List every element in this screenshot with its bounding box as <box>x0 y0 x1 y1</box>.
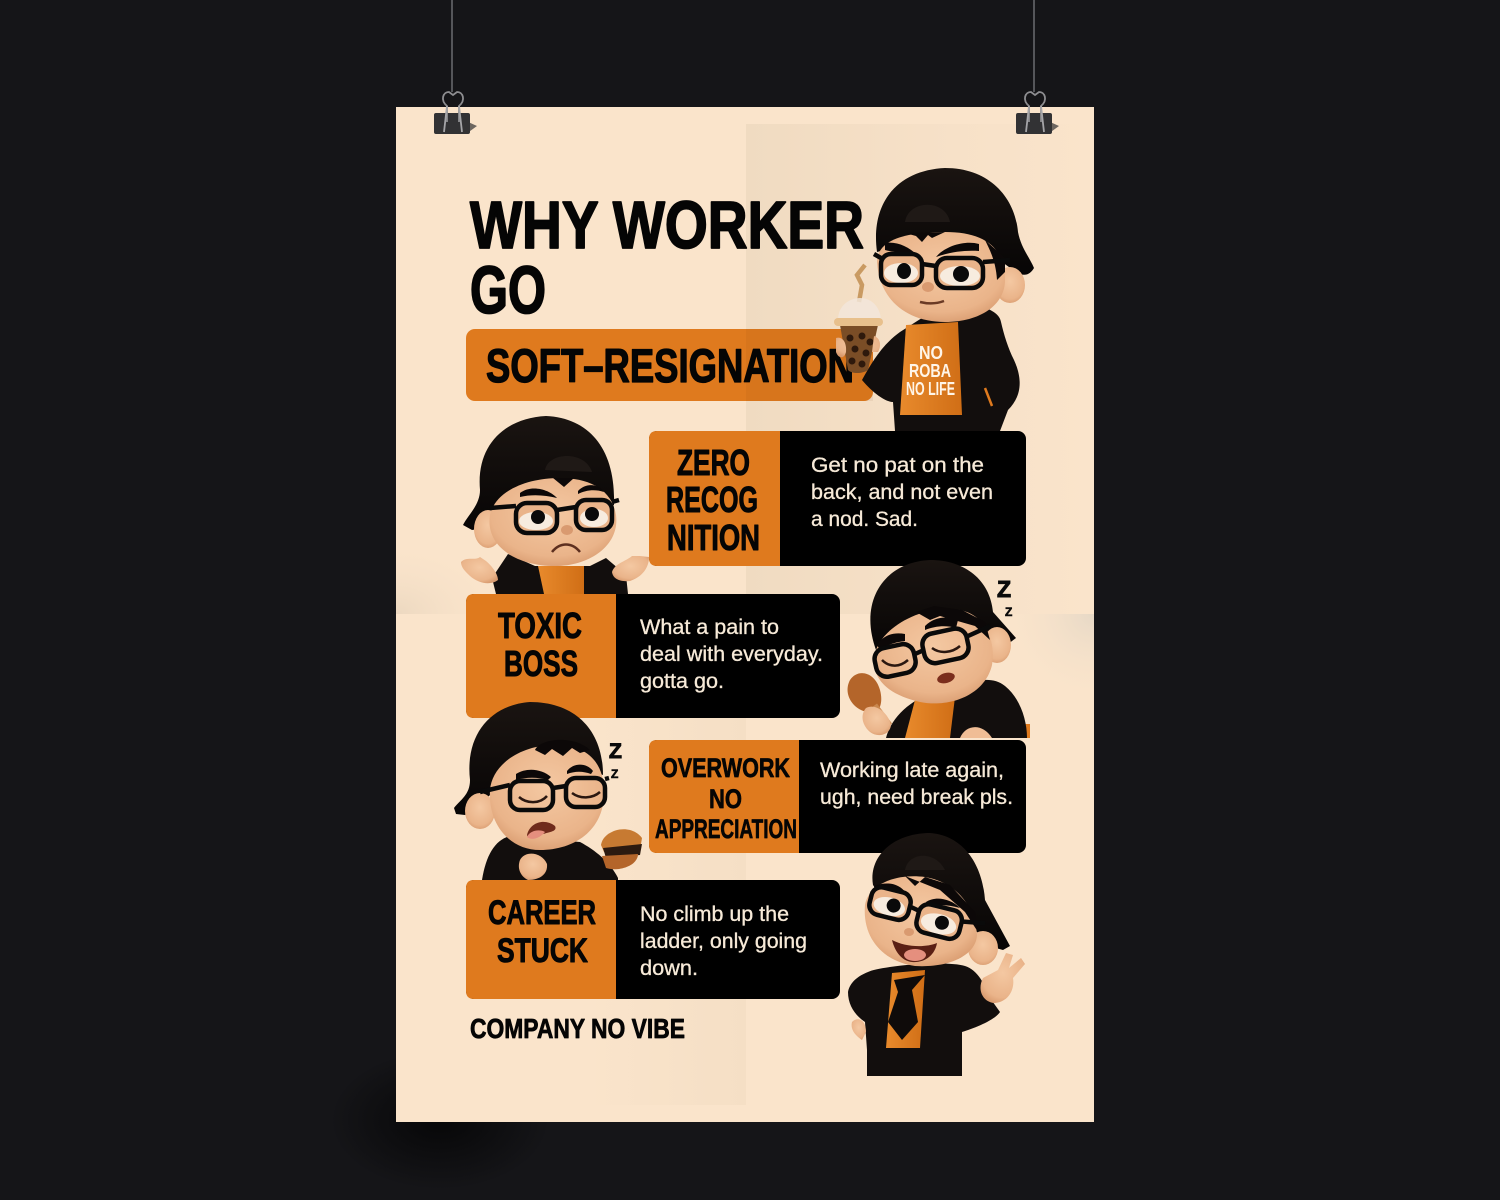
character: dozing with chicken <box>848 560 1030 738</box>
hair <box>916 606 990 640</box>
hair <box>535 740 590 756</box>
poster sheet <box>396 107 1094 1122</box>
character: peace sign <box>848 833 1025 1076</box>
snore z: Z <box>1005 605 1012 619</box>
fringe <box>905 232 1005 280</box>
card: career stuck: STUCK <box>497 932 588 970</box>
poster shadow <box>330 1050 550 1190</box>
mouth <box>527 822 556 838</box>
mouth <box>936 671 956 685</box>
hair <box>905 876 978 932</box>
ear <box>983 627 1011 663</box>
card: career stuck: No climb up the <box>640 903 789 926</box>
cap <box>463 416 614 530</box>
closed eyes <box>519 792 600 802</box>
orange tee <box>886 970 925 1048</box>
ear <box>474 510 502 548</box>
glasses <box>873 626 990 679</box>
brows <box>885 243 979 257</box>
left hand <box>852 1019 866 1040</box>
face <box>490 745 604 850</box>
face <box>489 478 616 566</box>
face <box>877 232 1005 322</box>
subtitle banner <box>466 329 873 401</box>
boba cup <box>857 265 865 302</box>
card: zero recognition: ZERO <box>677 442 750 483</box>
title: WHY WORKER <box>470 188 864 263</box>
hoodie and pants <box>848 964 1000 1076</box>
card: toxic boss <box>466 594 840 718</box>
subtitle banner: SOFT–RESIGNATION <box>486 339 854 392</box>
chicken <box>848 673 881 713</box>
tee slogan: ROBA <box>909 361 951 381</box>
title <box>470 188 864 328</box>
character: yawning with burger <box>454 702 642 880</box>
nose and mouth <box>922 282 934 292</box>
eyes and glasses <box>516 503 557 533</box>
tee slogan <box>906 343 955 399</box>
orange tee <box>900 322 962 415</box>
cap <box>870 560 1016 650</box>
character: boba drinker <box>834 168 1034 431</box>
card: zero recognition: back, and not even <box>811 481 993 504</box>
cap <box>454 702 603 815</box>
hand <box>836 336 880 357</box>
card: career stuck: ladder, only going <box>640 930 807 953</box>
ear <box>995 267 1025 303</box>
brows <box>516 765 593 780</box>
hanging clip right <box>1016 0 1059 134</box>
snore z: Z <box>611 767 618 781</box>
card: overwork no appreciation: NO <box>709 784 742 814</box>
cap <box>876 168 1034 275</box>
fist <box>519 854 547 880</box>
card: toxic boss: BOSS <box>504 643 578 684</box>
ear <box>968 931 998 965</box>
card: career stuck: CAREER <box>488 894 596 932</box>
tee slogan: NO LIFE <box>906 379 955 399</box>
left hand <box>461 557 498 583</box>
peace hand <box>981 953 1025 1003</box>
cap <box>872 833 1010 950</box>
character: shrugging <box>461 416 649 594</box>
nose and mouth <box>561 525 573 535</box>
tie <box>888 975 925 1040</box>
card: overwork no appreciation: OVERWORK <box>661 753 790 783</box>
burger <box>601 829 642 869</box>
hoodie body <box>492 554 628 594</box>
card: toxic boss: deal with everyday. <box>640 643 823 666</box>
snore z <box>997 576 1012 619</box>
tee slogan: NO <box>919 343 943 363</box>
brows <box>874 883 960 908</box>
card: zero recognition: a nod. Sad. <box>811 508 918 531</box>
brows <box>520 485 604 498</box>
card: toxic boss: What a pain to <box>640 616 779 639</box>
card: overwork no appreciation: ugh, need break pls. <box>820 786 1013 809</box>
snore z <box>609 740 622 781</box>
closed eyes <box>882 646 960 666</box>
snore z: Z <box>609 740 622 763</box>
card: zero recognition: Get no pat on the <box>811 454 984 477</box>
hoodie body <box>886 680 1027 738</box>
footer tagline: COMPANY NO VIBE <box>470 1013 685 1044</box>
brows <box>877 618 958 650</box>
card: overwork no appreciation: APPRECIATION <box>655 814 797 844</box>
eyes and glasses <box>881 254 922 285</box>
card: overwork no appreciation <box>649 740 1026 853</box>
orange corner <box>1018 724 1030 738</box>
glasses <box>480 778 609 810</box>
face <box>874 609 993 703</box>
card: overwork no appreciation: Working late again, <box>820 759 1004 782</box>
card: zero recognition: NITION <box>667 517 760 558</box>
ear <box>465 793 495 829</box>
open smile <box>892 940 937 962</box>
snore z: Z <box>997 576 1011 602</box>
card: career stuck <box>466 880 840 999</box>
hanging clip left <box>434 0 477 134</box>
face <box>865 876 977 966</box>
title: GO <box>470 253 546 328</box>
right hand <box>612 556 649 581</box>
hoodie body <box>482 836 618 880</box>
nose <box>904 928 914 936</box>
card: toxic boss: gotta go. <box>640 670 724 693</box>
hoodie body <box>862 308 1020 431</box>
hand <box>863 707 891 735</box>
card: career stuck: down. <box>640 957 698 980</box>
card: zero recognition: RECOG <box>666 479 758 520</box>
card: toxic boss: TOXIC <box>498 605 582 646</box>
eyes and glasses <box>866 885 988 946</box>
card: zero recognition <box>649 431 1026 566</box>
